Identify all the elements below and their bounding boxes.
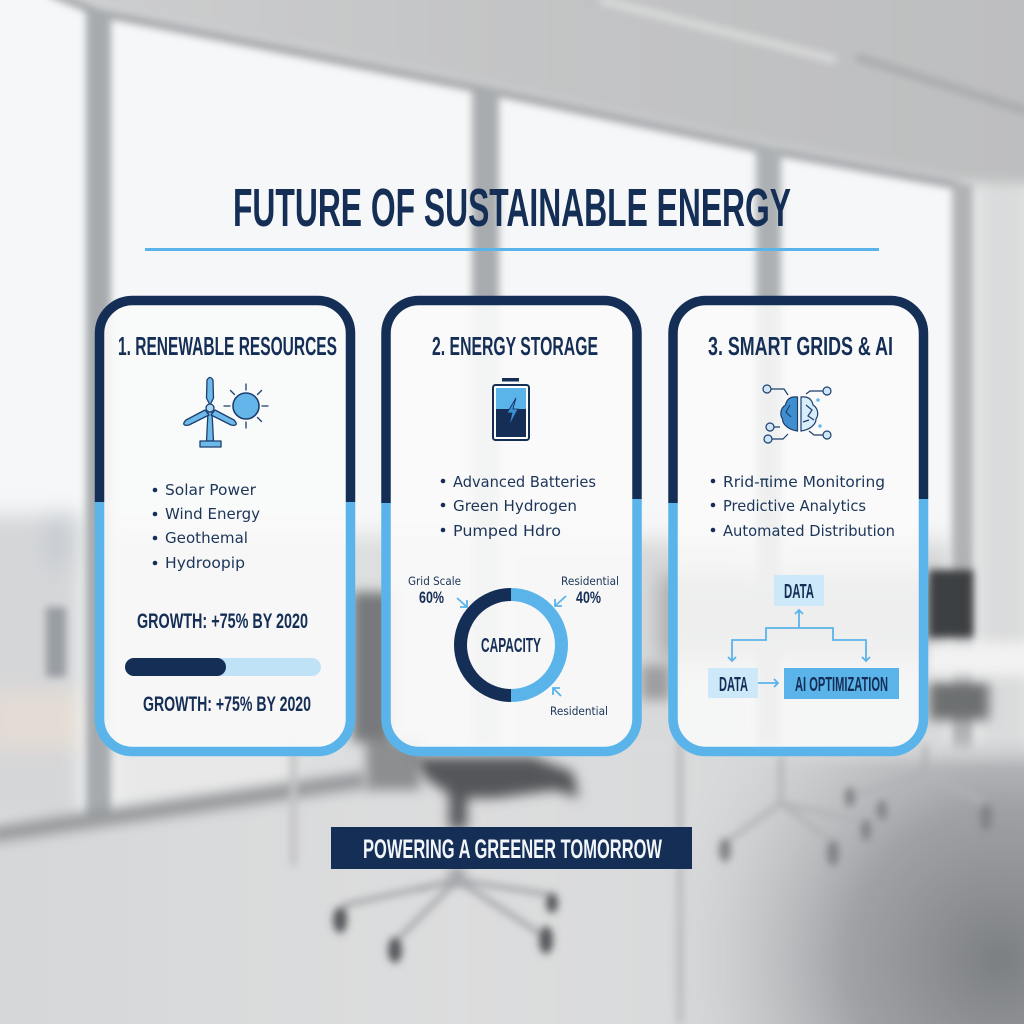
- list: renewable sources: Geothemal: [165, 529, 248, 547]
- growth label: GROWTH: +75% BY 2020: [137, 610, 308, 633]
- heading: smart grids: 3. SMART GRIDS & AI: [708, 331, 893, 361]
- list: renewable sources: Hydroopip: [165, 554, 245, 572]
- donut label: grid scale: Grid Scale: [408, 574, 461, 588]
- list: storage types: Advanced Batteries: [453, 473, 596, 491]
- donut chart: capacity: [460, 594, 562, 696]
- panel: smart grids and AI: [673, 300, 924, 752]
- donut label: grid scale: 60%: [419, 588, 444, 607]
- donut label: residential: [561, 574, 619, 607]
- icon: AI brain circuit: [763, 385, 831, 443]
- title underline: [145, 248, 879, 251]
- growth caption: GROWTH: +75% BY 2020: [143, 693, 311, 716]
- box: top data: [774, 575, 824, 606]
- donut centre label: CAPACITY: [481, 635, 541, 657]
- list: storage types: Pumped Hdro: [453, 522, 561, 540]
- panel: renewable resources: [100, 300, 350, 752]
- list: smart grid features: [711, 473, 895, 540]
- list: renewable sources: Solar Power: [165, 481, 257, 499]
- box: lower data: DATA: [719, 674, 748, 696]
- box: top data: DATA: [784, 581, 814, 603]
- donut label: residential lower: Residential: [550, 704, 608, 718]
- heading: energy storage: 2. ENERGY STORAGE: [432, 331, 598, 361]
- progress bar: [125, 658, 321, 676]
- icon: wind turbine and sun: [184, 378, 268, 447]
- list: smart grid features: Rrid-πime Monitoring: [723, 473, 885, 491]
- box: lower data: [708, 668, 758, 698]
- banner: tagline: POWERING A GREENER TOMORROW: [363, 834, 662, 864]
- donut label: residential: Residential: [561, 574, 619, 588]
- list: renewable sources: Wind Energy: [165, 505, 260, 523]
- flow diagram: data to AI optimization: [708, 575, 899, 699]
- donut label: residential: 40%: [576, 588, 601, 607]
- arrows: donut callouts: [457, 596, 566, 696]
- panel: energy storage: [386, 300, 637, 752]
- banner: tagline: [331, 827, 692, 869]
- heading: renewable resources: 1. RENEWABLE RESOURCES: [118, 331, 337, 361]
- list: storage types: [441, 473, 596, 540]
- icon: battery: [493, 378, 529, 440]
- donut label: grid scale: [408, 574, 461, 607]
- box: AI optimization: [784, 668, 899, 699]
- box: AI optimization: AI OPTIMIZATION: [795, 674, 888, 696]
- list: renewable sources: [153, 481, 260, 572]
- arrows: flow connectors: [728, 610, 870, 687]
- list: storage types: Green Hydrogen: [453, 497, 577, 515]
- list: smart grid features: Predictive Analytics: [723, 497, 866, 515]
- list: smart grid features: Automated Distribution: [723, 522, 895, 540]
